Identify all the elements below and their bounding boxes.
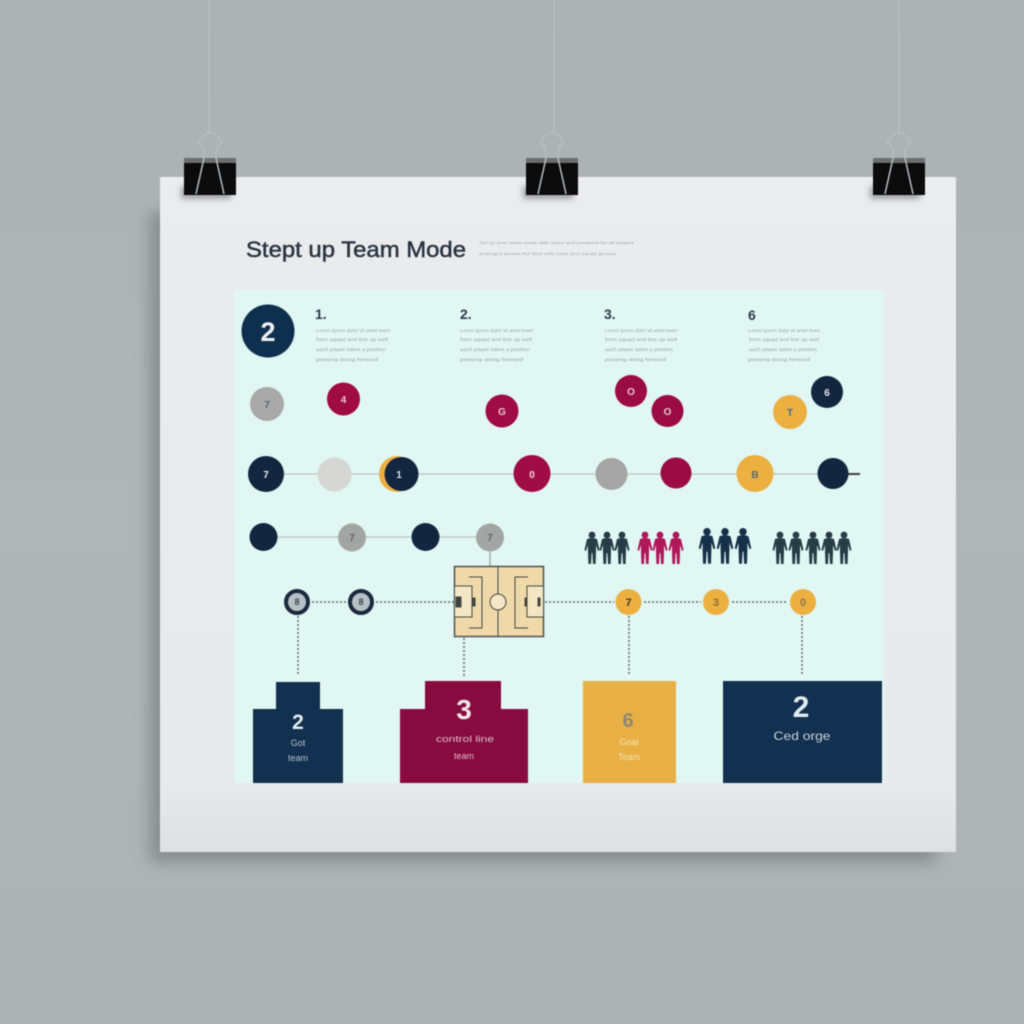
timeline row one (248, 455, 860, 492)
timeline row one: 0 (529, 470, 535, 481)
poster sheet (160, 177, 956, 852)
binder clip right (870, 132, 925, 199)
header description: arranged across the field with roles and squad groups (479, 251, 616, 256)
timeline row one: B (751, 470, 759, 481)
scattered number circles: G (498, 407, 506, 418)
step column 3: Lorem ipsum dolor sit amet team (605, 328, 677, 333)
result box gold: 6 (622, 710, 634, 732)
player groups (584, 528, 852, 564)
ring nodes: 8 (294, 597, 300, 607)
scattered number circles: 6 (824, 388, 830, 399)
step column 3: each player takes a position (605, 347, 674, 352)
player group three (699, 528, 751, 564)
step badge (242, 304, 294, 358)
step column 4: 6 (748, 307, 756, 323)
main panel (234, 290, 884, 783)
result box navy wide (723, 681, 882, 783)
player group four (772, 532, 852, 564)
timeline row two: 7 (487, 533, 493, 544)
step column 1: each player takes a position (316, 347, 387, 352)
scattered number circles: O (627, 387, 635, 398)
step column 1 (315, 306, 390, 362)
step column 3: 3. (604, 306, 616, 322)
step column 1: Lorem ipsum dolor sit amet team (316, 328, 390, 333)
scattered number circles: O (664, 407, 672, 418)
player group two (638, 532, 684, 564)
result box navy wide: 2 (793, 691, 809, 724)
timeline row two (250, 523, 504, 566)
gold nodes: 0 (800, 597, 806, 609)
step column 1: form squad and line up well (316, 337, 388, 342)
step column 4: form squad and line up well (749, 337, 819, 342)
scattered number circles: 4 (341, 395, 347, 406)
scattered number circles: 7 (264, 400, 270, 411)
football pitch (454, 566, 544, 637)
step column 2: form squad and line up well (460, 337, 532, 342)
result box navy stepped: 2 (292, 711, 304, 734)
binder clip left (181, 132, 236, 199)
result box navy wide: Ced orge (774, 729, 831, 743)
result box gold (583, 681, 676, 783)
header description (479, 240, 634, 256)
ring nodes: 8 (358, 597, 364, 607)
result box navy stepped (253, 682, 343, 783)
timeline row one: 1 (396, 470, 402, 481)
gold nodes (616, 589, 816, 615)
step column 2: passing along forward (460, 357, 524, 362)
scattered number circles (250, 375, 843, 429)
step column 1: 1. (315, 306, 327, 322)
paper shadow (150, 212, 936, 862)
timeline row two: 7 (349, 533, 355, 544)
step column 4: each player takes a position (749, 347, 818, 352)
step badge: 2 (260, 317, 276, 347)
result box maroon stepped: 3 (456, 694, 472, 725)
step column 4: Lorem ipsum dolor sit amet team (748, 328, 820, 333)
binder clip centre (523, 132, 578, 199)
result box gold: Team (618, 752, 640, 762)
step column 4: passing along forward (748, 357, 811, 362)
scattered number circles: T (787, 408, 793, 419)
dotted connectors (298, 602, 802, 676)
gold nodes: 3 (713, 597, 719, 609)
step column 1: passing along forward (316, 357, 379, 362)
result box gold: Goal (619, 737, 639, 747)
step column 3: passing along forward (605, 357, 667, 362)
player group one (584, 532, 630, 564)
title: Stept up Team Mode (246, 237, 466, 262)
hanging strings (209, 0, 899, 135)
header description: Set up your team mode with steps and positions for all players (479, 240, 634, 245)
result box maroon stepped: team (454, 751, 474, 761)
ring nodes (286, 591, 372, 613)
step column 2: 2. (460, 306, 472, 322)
gold nodes: 7 (625, 597, 632, 609)
step column 2: Lorem ipsum dolor sit amet team (460, 328, 533, 333)
step column 4 (748, 307, 820, 362)
result box navy stepped: Got (291, 738, 306, 748)
step column 3: form squad and line up well (605, 337, 677, 342)
step column 3 (604, 306, 677, 362)
result box maroon stepped (400, 681, 528, 783)
result box maroon stepped: control line (436, 734, 494, 744)
step column 2: each player takes a position (460, 347, 531, 352)
result box navy stepped: team (288, 753, 308, 763)
step column 2 (460, 306, 533, 362)
timeline row one: 7 (263, 470, 269, 481)
